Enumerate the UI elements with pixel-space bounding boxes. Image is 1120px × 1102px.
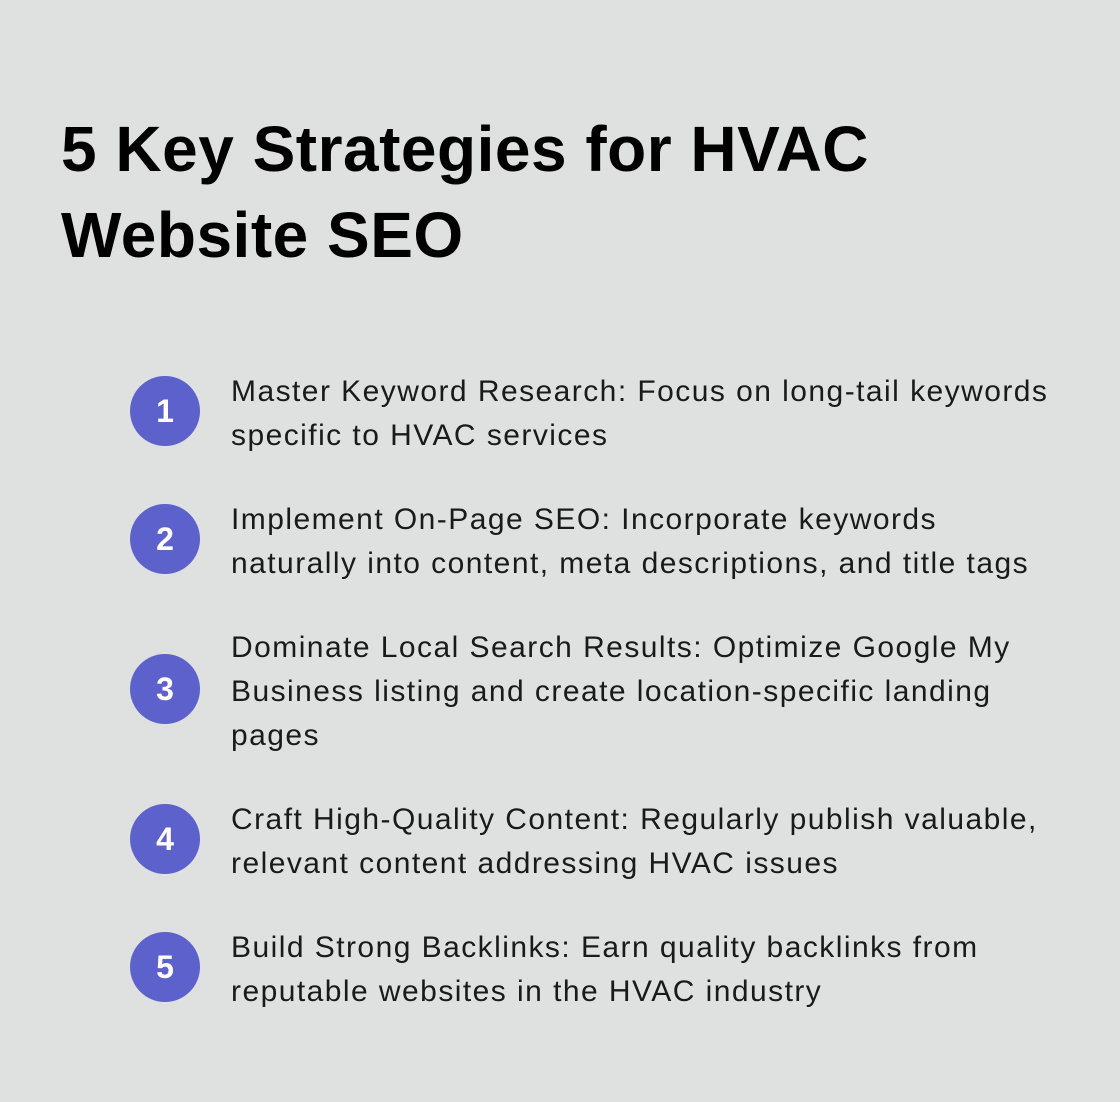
text 5: reputable websites in the HVAC industry — [231, 975, 822, 1008]
icon: number 5 — [130, 932, 200, 1002]
text 1: specific to HVAC services — [231, 419, 608, 452]
icon: number 1 — [130, 376, 200, 446]
title: Website SEO — [61, 199, 464, 271]
icon: number 2 — [130, 504, 200, 574]
icon: number 5: 5 — [156, 948, 174, 984]
icon: number 2: 2 — [156, 520, 174, 556]
text 3: Dominate Local Search Results: Optimize Google My — [231, 631, 1011, 664]
text 4 — [231, 803, 1038, 880]
text 2: Implement On-Page SEO: Incorporate keywords — [231, 503, 937, 536]
item 2 — [130, 503, 1029, 580]
title — [61, 113, 869, 271]
text 3: pages — [231, 719, 320, 752]
text 1 — [231, 375, 1048, 452]
text 1: Master Keyword Research: Focus on long-tail keywords — [231, 375, 1048, 408]
item 5 — [130, 931, 979, 1008]
icon: number 4: 4 — [156, 820, 174, 856]
icon: number 3: 3 — [156, 670, 174, 706]
text 2: naturally into content, meta descriptions, and title tags — [231, 547, 1029, 580]
item 3 — [130, 631, 1011, 752]
item 1 — [130, 375, 1048, 452]
text 4: Craft High-Quality Content: Regularly publish valuable, — [231, 803, 1038, 836]
text 5 — [231, 931, 979, 1008]
title: 5 Key Strategies for HVAC — [61, 113, 869, 185]
icon: number 1: 1 — [156, 392, 174, 428]
text 3 — [231, 631, 1011, 752]
text 4: relevant content addressing HVAC issues — [231, 847, 839, 880]
text 3: Business listing and create location-specific landing — [231, 675, 992, 708]
text 5: Build Strong Backlinks: Earn quality backlinks from — [231, 931, 979, 964]
icon: number 3 — [130, 654, 200, 724]
text 2 — [231, 503, 1029, 580]
icon: number 4 — [130, 804, 200, 874]
item 4 — [130, 803, 1038, 880]
